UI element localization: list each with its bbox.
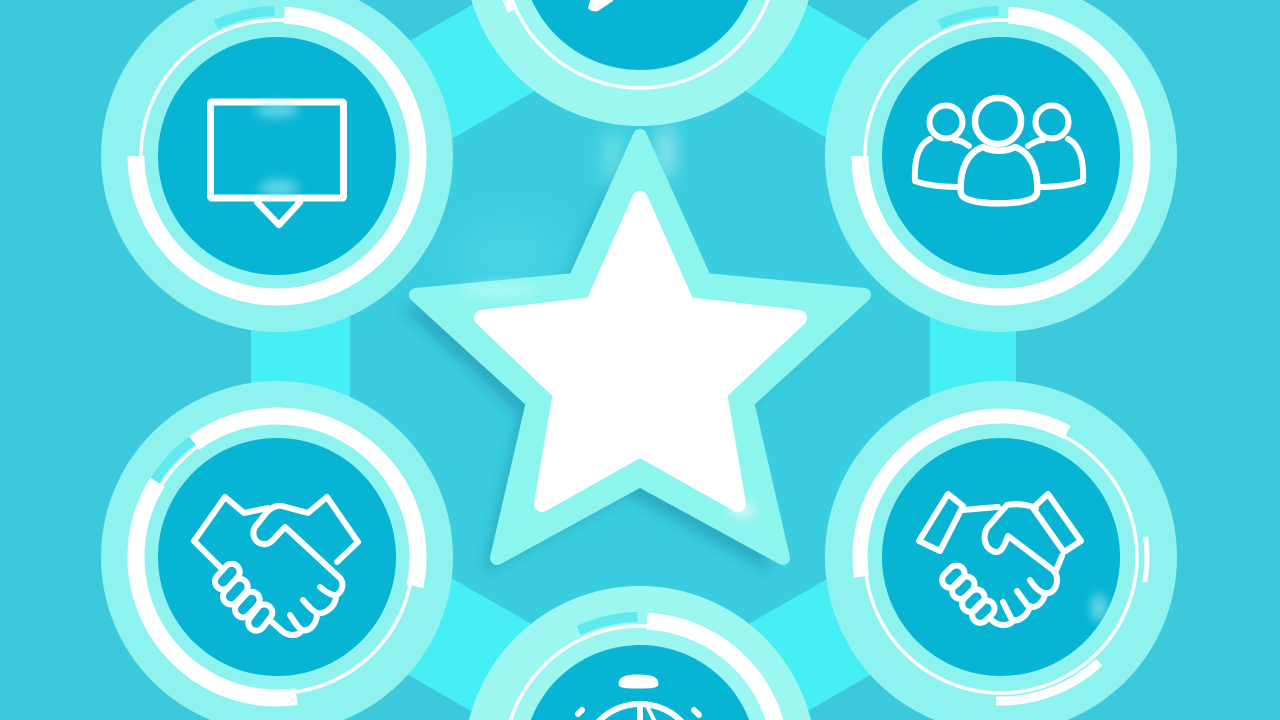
glint bbox=[1091, 594, 1107, 622]
circle: stopwatch partial bbox=[464, 586, 816, 720]
circle: people group bbox=[825, 0, 1177, 332]
icon: pen tip bbox=[588, 0, 613, 11]
circle: speech bubble bbox=[101, 0, 453, 332]
star tip glow bbox=[728, 503, 756, 517]
hexagon ring band bbox=[252, 0, 1015, 720]
circle: handshake right bbox=[825, 381, 1177, 720]
circle: handshake left bbox=[80, 360, 474, 720]
icon: handshake left bbox=[194, 497, 358, 635]
star highlight bbox=[460, 282, 540, 298]
star inner white bbox=[482, 199, 799, 504]
icon: stopwatch bbox=[578, 675, 699, 720]
circle: top partial bbox=[464, 0, 816, 126]
icon: handshake right bbox=[919, 494, 1081, 626]
inner hexagon bbox=[357, 38, 923, 678]
icon: people group bbox=[915, 98, 1083, 204]
icon: speech bubble bbox=[210, 102, 344, 225]
star outer bbox=[416, 136, 864, 558]
star glow and shadow bbox=[401, 124, 853, 573]
bubble glints bbox=[255, 102, 299, 197]
